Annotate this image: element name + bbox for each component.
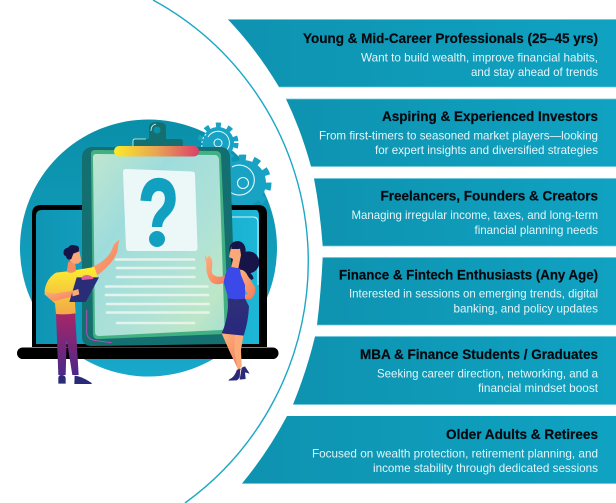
raised arm	[92, 240, 119, 276]
heading: Aspiring & Experienced Investors	[382, 109, 598, 124]
board	[82, 147, 236, 346]
clip	[133, 122, 183, 148]
panel: finance and fintech enthusiasts	[317, 258, 616, 325]
back arm	[204, 254, 226, 284]
neck and head	[67, 262, 76, 273]
pants	[56, 312, 79, 375]
panel: older adults and retirees	[242, 416, 616, 484]
person: man	[45, 240, 119, 384]
panel: freelancers, founders and creators	[314, 178, 616, 246]
handheld clipboard	[69, 277, 99, 302]
shirt	[45, 267, 97, 314]
heading: Freelancers, Founders & Creators	[380, 188, 598, 204]
colour bar	[114, 146, 199, 156]
clipboard	[82, 122, 236, 346]
icon: gears	[200, 125, 268, 208]
background circle	[20, 120, 277, 376]
description: financial planning needs	[474, 223, 598, 237]
person: woman	[204, 241, 259, 381]
description: Want to build wealth, improve financial habits,	[361, 50, 598, 64]
decorative arc line	[153, 0, 308, 503]
description: Interested in sessions on emerging trends, digital	[349, 286, 598, 300]
illustration: clipboard and people	[17, 120, 278, 384]
description: Seeking career direction, networking, and a	[377, 366, 598, 380]
face and neck	[229, 246, 241, 268]
skirt	[222, 298, 249, 336]
description: From first-timers to seasoned market players—looking	[319, 128, 598, 142]
description: Focused on wealth protection, retirement planning, and	[312, 446, 598, 460]
question mark: ?	[138, 159, 179, 268]
description: and stay ahead of trends	[471, 65, 598, 79]
description: financial mindset boost	[478, 381, 599, 395]
panel: MBA and finance students	[293, 336, 616, 404]
heading: Young & Mid-Career Professionals (25–45 yrs)	[303, 31, 598, 46]
forearm	[45, 290, 77, 301]
description: banking, and policy updates	[454, 302, 598, 316]
heading: MBA & Finance Students / Graduates	[360, 347, 598, 362]
top	[224, 267, 245, 299]
hair	[237, 251, 259, 273]
description: for expert insights and diversified strategies	[375, 143, 598, 157]
shoes	[228, 369, 240, 381]
text lines	[106, 260, 208, 323]
heading: Older Adults & Retirees	[446, 427, 598, 442]
laptop	[17, 205, 278, 359]
legs	[222, 333, 241, 370]
panel: young and mid-career professionals	[228, 20, 616, 87]
panel: aspiring and experienced investors	[286, 99, 616, 166]
heading: Finance & Fintech Enthusiasts (Any Age)	[339, 268, 598, 282]
question card	[123, 169, 198, 251]
right arm on hip	[238, 270, 255, 299]
description: Managing irregular income, taxes, and long-term	[352, 208, 598, 222]
description: income stability through dedicated sessions	[373, 461, 598, 475]
